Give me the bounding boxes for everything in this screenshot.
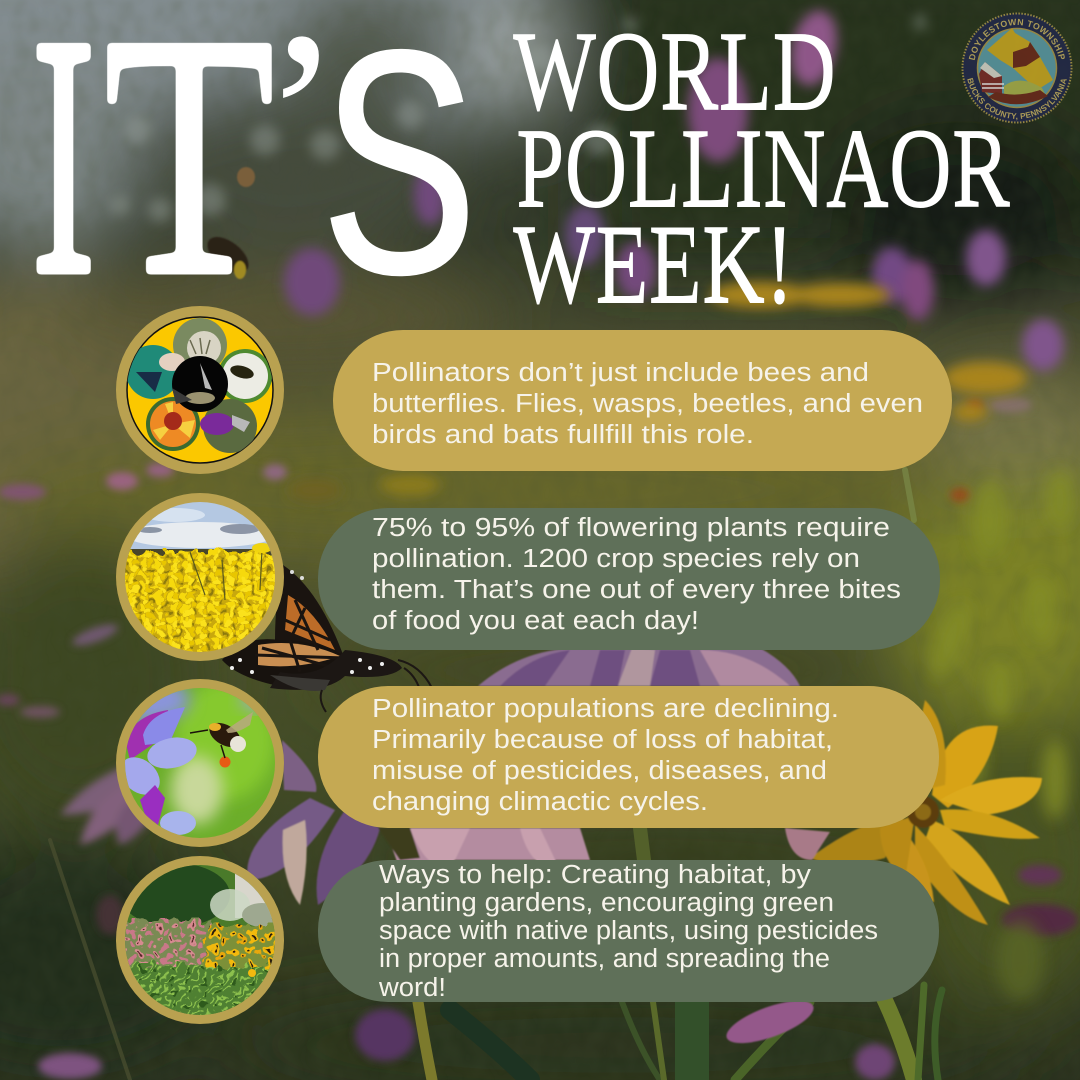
text block: why they matter: pollination. 1200 crop species rely on [372, 545, 860, 573]
coneflower left petals behind circle [60, 762, 150, 845]
text block: decline: misuse of pesticides, diseases, and [372, 757, 827, 785]
heading: World Pollinaor Week! [513, 10, 1010, 327]
text block: ways to help: space with native plants, using pesticides [379, 917, 878, 945]
text block: ways to help [378, 861, 878, 1002]
title: IT'S: S [320, 0, 481, 375]
text block: who pollinators are: birds and bats fullfill this role. [372, 421, 754, 449]
foreground stems and leaves [50, 470, 942, 1080]
text block: ways to help: planting gardens, encouraging green [379, 889, 834, 917]
blurred bumblebees [201, 167, 255, 280]
title: IT'S [29, 0, 481, 375]
pill: green [318, 860, 939, 1002]
text block: who pollinators are: butterflies. Flies, wasps, beetles, and even [372, 390, 923, 418]
text block: why they matter: of food you eat each day! [372, 607, 699, 635]
panel: decline [318, 686, 939, 828]
pill: green [318, 508, 940, 650]
panel: why they matter [318, 508, 940, 650]
text block: decline: changing climactic cycles. [372, 788, 708, 816]
text block: ways to help: Ways to help: Creating habitat, by [379, 861, 811, 889]
text block: who pollinators are [372, 359, 923, 449]
text block: decline [372, 695, 839, 816]
text block: decline: Pollinator populations are declining. [372, 695, 839, 723]
coneflower top petals [478, 648, 800, 686]
tree bokeh [110, 15, 927, 222]
panel: who pollinators are [333, 330, 952, 471]
monarch butterfly [222, 565, 432, 712]
panel: ways to help [318, 860, 939, 1002]
yellow daisy [785, 700, 1042, 925]
icon: bumblebee and lupine circle [110, 678, 284, 847]
text block: ways to help: word! [378, 974, 446, 1002]
heading: World Pollinaor Week!: WORLD [513, 10, 836, 134]
icon: rapeseed field circle [110, 493, 290, 662]
text block: ways to help: in proper amounts, and spreading the [379, 945, 830, 973]
logo: Doylestown Township seal: BUCKS COUNTY, PENNSYLVANIA [967, 78, 1067, 120]
pink flower bottom [722, 992, 818, 1052]
text block: who pollinators are: Pollinators don’t just include bees and [372, 359, 869, 387]
heading: World Pollinaor Week!: WEEK! [513, 203, 794, 327]
logo: Doylestown Township seal: DOYLESTOWN TOWNSHIP [968, 18, 1065, 60]
text block: decline: Primarily because of loss of habitat, [372, 726, 833, 754]
logo: Doylestown Township seal [962, 12, 1072, 124]
text block: why they matter: them. That’s one out of every three bites [372, 576, 901, 604]
icon: native plant garden circle [116, 856, 290, 1030]
text block: why they matter [372, 514, 901, 635]
icon: pollinator collage circle [116, 306, 284, 474]
blurred yellow flowers [289, 282, 1027, 501]
blurred purple flower spikes [284, 6, 1064, 371]
pill: gold [318, 686, 939, 828]
text block: why they matter: 75% to 95% of flowering plants require [372, 514, 890, 542]
pill: gold [333, 330, 952, 471]
coneflower lower petals [247, 740, 590, 905]
